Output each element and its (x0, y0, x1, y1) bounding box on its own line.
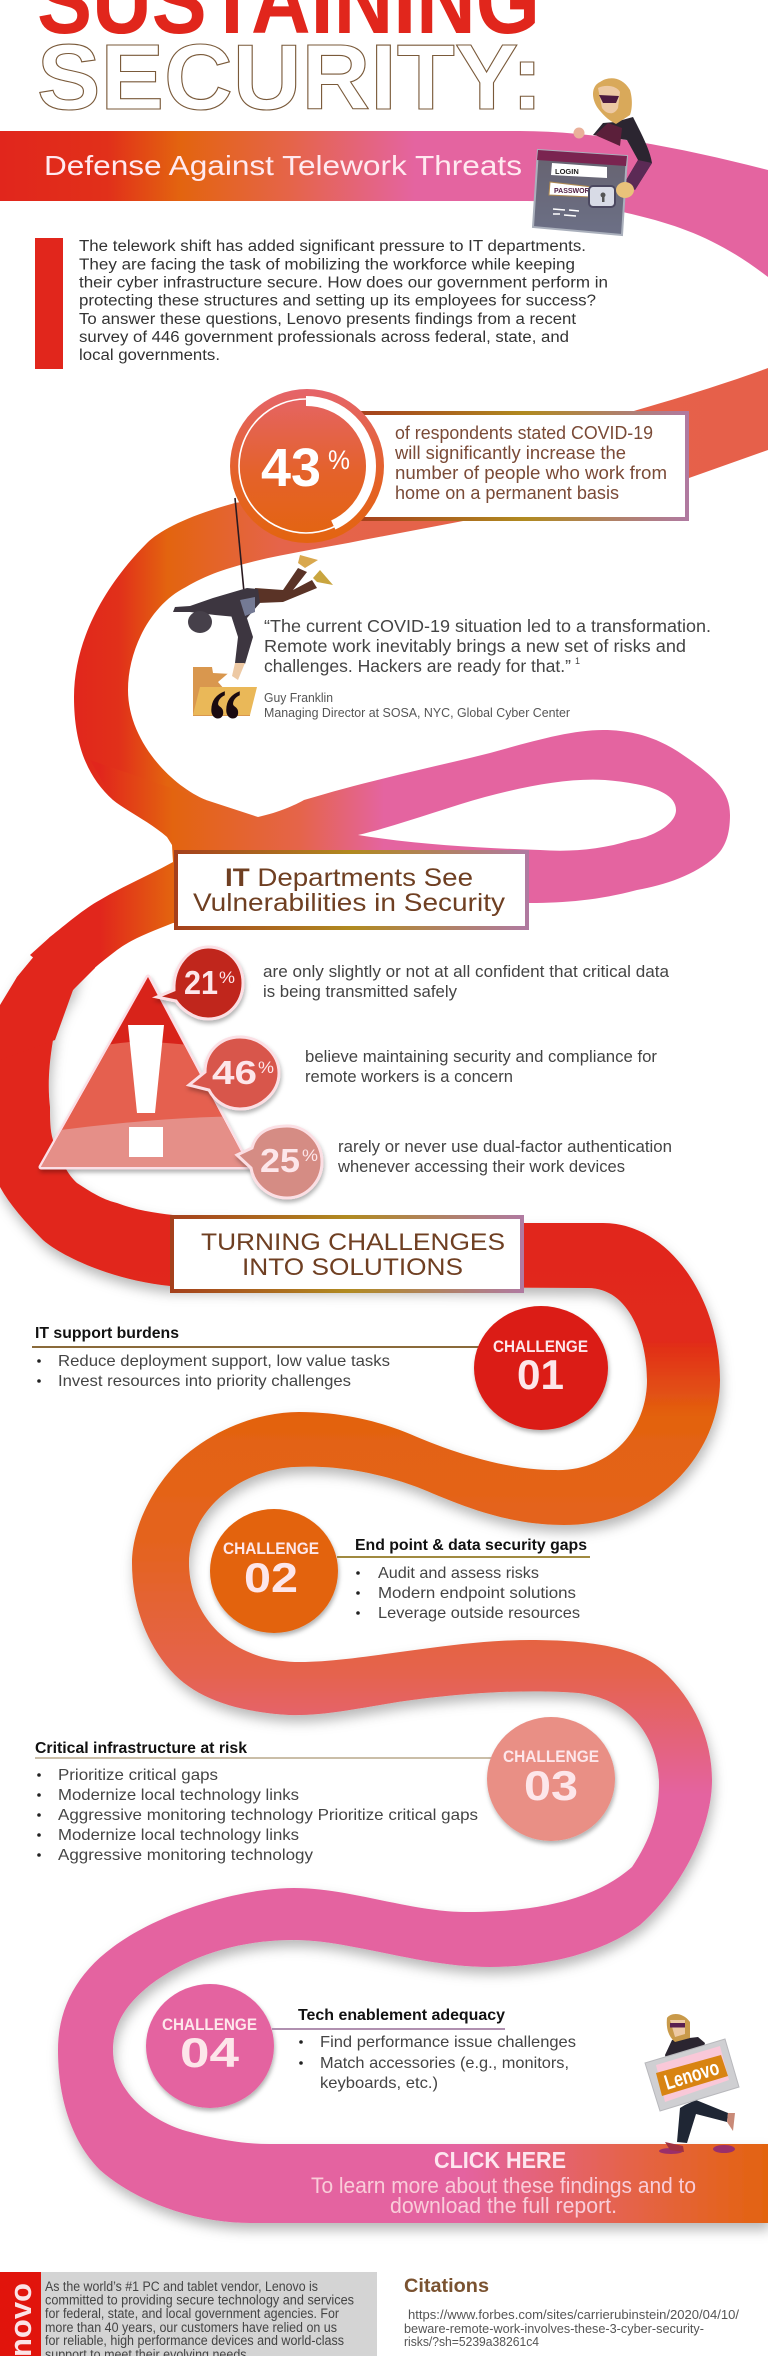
text 03: Modernize local technology links (58, 1787, 299, 1804)
ribbon: upper descent (74, 368, 768, 800)
bubble 46: 46 (212, 1054, 257, 1091)
quote: Remote work inevitably brings a new set of risks and (264, 636, 686, 656)
badge 03: CHALLENGE (503, 1747, 599, 1766)
title: SECURITY: (37, 25, 543, 129)
about text: committed to providing secure technology and services (45, 2292, 354, 2308)
text 02 (337, 1537, 590, 1622)
43 percent circle (230, 389, 384, 543)
bubble 21: 21 (184, 964, 218, 1001)
text 21: are only slightly or not at all confident that critical data (263, 963, 670, 981)
intro text: To answer these questions, Lenovo presents findings from a recent (79, 311, 577, 328)
badge 01: CHALLENGE (493, 1337, 588, 1356)
intro text: They are facing the task of mobilizing the workforce while keeping (79, 256, 575, 274)
icon: warning triangle (30, 970, 260, 1170)
text 04: Tech enablement adequacy (298, 2007, 505, 2024)
bubble 25: 25 (260, 1142, 300, 1179)
panel: challenge 04 (146, 1984, 576, 2108)
text 46 (305, 1048, 658, 1086)
about text (45, 2279, 354, 2356)
badge 01 (474, 1306, 608, 1430)
badge 04: 04 (180, 2029, 240, 2076)
text 03: Aggressive monitoring technology Prioritize critical gaps (58, 1807, 478, 1824)
badge 04 (146, 1984, 274, 2108)
footer panel: about Lenovo (0, 2272, 377, 2356)
text 01: Invest resources into priority challenges (58, 1373, 351, 1390)
43 percent circle: 43 (261, 438, 321, 498)
panel: click here call to action: CLICK HERE (434, 2147, 566, 2173)
panel: click here call to action: download the full report. (390, 2193, 617, 2218)
heading: turning challenges (172, 1217, 522, 1291)
icon: hanging hacker and folder: “ (208, 672, 242, 771)
quote: “The current COVID-19 situation led to a transformation. (264, 616, 711, 636)
statistic text (394, 423, 667, 503)
text 03: Aggressive monitoring technology (58, 1847, 313, 1864)
bubble 46: % (258, 1058, 274, 1077)
panel: challenge 02 (210, 1509, 590, 1633)
intro text (79, 238, 608, 364)
stat: 21 percent (157, 947, 670, 1019)
bubble 25 (237, 1126, 322, 1198)
text 03: Critical infrastructure at risk (35, 1740, 247, 1757)
heading: turning challenges: TURNING CHALLENGES (201, 1229, 505, 1256)
intro text: survey of 446 government professionals across federal, state, and (79, 329, 569, 346)
badge 02: CHALLENGE (223, 1539, 319, 1558)
badge 03: 03 (524, 1762, 578, 1809)
intro text: The telework shift has added significant pressure to IT departments. (79, 238, 586, 255)
panel: 43 percent statistic (230, 389, 687, 543)
stat: 46 percent (189, 1037, 658, 1109)
icon: hacker with login panel: PASSWORD (554, 188, 595, 195)
text 04: Find performance issue challenges (320, 2034, 576, 2051)
icon: hacker with login panel (533, 78, 652, 235)
text 01 (32, 1325, 482, 1390)
about text: more than 40 years, our customers have relied on us (45, 2320, 337, 2335)
quote (264, 616, 711, 720)
citations (404, 2276, 739, 2349)
bubble 25: % (302, 1146, 318, 1165)
icon: hacker with login panel: LOGIN (555, 167, 579, 176)
badge 03 (487, 1717, 615, 1841)
heading: turning challenges: INTO SOLUTIONS (242, 1254, 463, 1281)
text 02: Audit and assess risks (378, 1565, 539, 1582)
about text: for federal, state, and local government agencies. For (45, 2306, 339, 2321)
citations: https://www.forbes.com/sites/carrierubinstein/2020/04/10/ (408, 2307, 739, 2322)
about text: As the world’s #1 PC and tablet vendor, Lenovo is (45, 2279, 318, 2294)
heading: IT departments (176, 852, 527, 928)
heading: IT departments: IT Departments See (225, 864, 473, 892)
heading: IT departments: Vulnerabilities in Security (193, 889, 506, 917)
text 04: keyboards, etc.) (320, 2075, 438, 2092)
citations: risks/?sh=5239a38261c4 (404, 2334, 539, 2349)
quote: Managing Director at SOSA, NYC, Global Cyber Center (264, 706, 570, 720)
text 01: IT support burdens (35, 1325, 179, 1342)
text 03: Prioritize critical gaps (58, 1767, 218, 1784)
ribbon: pink loop (30, 730, 730, 990)
quote: challenges. Hackers are ready for that.” (264, 656, 571, 676)
statistic text: will significantly increase the (394, 443, 626, 463)
text 46: remote workers is a concern (305, 1068, 513, 1086)
subtitle: Defense Against Telework Threats (44, 150, 522, 181)
icon: hacker carrying Lenovo sign: Lenovo (662, 2056, 722, 2095)
panel: intro (35, 238, 608, 369)
text 04 (272, 2007, 576, 2092)
icon: hanging hacker and folder (173, 498, 333, 771)
citations: Citations (404, 2276, 489, 2297)
stat: 25 percent (237, 1126, 672, 1198)
43 percent circle: % (328, 445, 350, 475)
bubble 21 (157, 947, 243, 1019)
statistic text: number of people who work from (395, 463, 667, 483)
ribbon: top banner (0, 131, 768, 277)
intro accent bar (35, 238, 63, 369)
text 03 (35, 1740, 492, 1864)
text 46: believe maintaining security and compliance for (305, 1048, 658, 1066)
text 25 (337, 1138, 672, 1176)
text 25: rarely or never use dual-factor authentication (338, 1138, 672, 1156)
badge 01: 01 (517, 1351, 564, 1398)
about text: for reliable, high performance devices and world-class (45, 2333, 344, 2348)
icon: hacker carrying Lenovo sign (645, 2014, 739, 2154)
panel: click here call to action (311, 2147, 696, 2218)
text 04: Match accessories (e.g., monitors, (320, 2055, 569, 2072)
text 21 (263, 963, 670, 1001)
text 25: whenever accessing their work devices (337, 1158, 625, 1176)
text 03: Modernize local technology links (58, 1827, 299, 1844)
intro text: their cyber infrastructure secure. How does our government perform in (79, 274, 608, 292)
text 21: is being transmitted safely (263, 983, 458, 1001)
intro text: local governments. (79, 347, 220, 364)
bubble 46 (189, 1037, 279, 1109)
intro text: protecting these structures and setting up its employees for success? (79, 292, 596, 310)
statistic text: home on a permanent basis (395, 483, 619, 503)
text 02: Leverage outside resources (378, 1605, 580, 1622)
text 02: End point & data security gaps (355, 1537, 587, 1554)
badge 02: 02 (244, 1554, 298, 1601)
panel: challenge 01 (32, 1306, 608, 1430)
bubble 21: % (219, 968, 235, 987)
text 01: Reduce deployment support, low value tasks (58, 1353, 390, 1370)
badge 04: CHALLENGE (162, 2015, 257, 2034)
ribbon: seam patch at left bend (0, 905, 95, 1060)
ribbon: lower serpentine and call to action band (0, 937, 768, 2223)
statistic text box (360, 413, 687, 519)
text 02: Modern endpoint solutions (378, 1585, 576, 1602)
panel: challenge 03 (35, 1717, 615, 1864)
badge 02 (210, 1509, 338, 1633)
quote: Guy Franklin (264, 691, 333, 705)
panel: click here call to action: To learn more about these findings and to (311, 2173, 696, 2198)
citations: beware-remote-work-involves-these-3-cyber-security- (404, 2321, 704, 2336)
statistic text: of respondents stated COVID-19 (395, 423, 653, 443)
quote: 1 (575, 656, 580, 666)
